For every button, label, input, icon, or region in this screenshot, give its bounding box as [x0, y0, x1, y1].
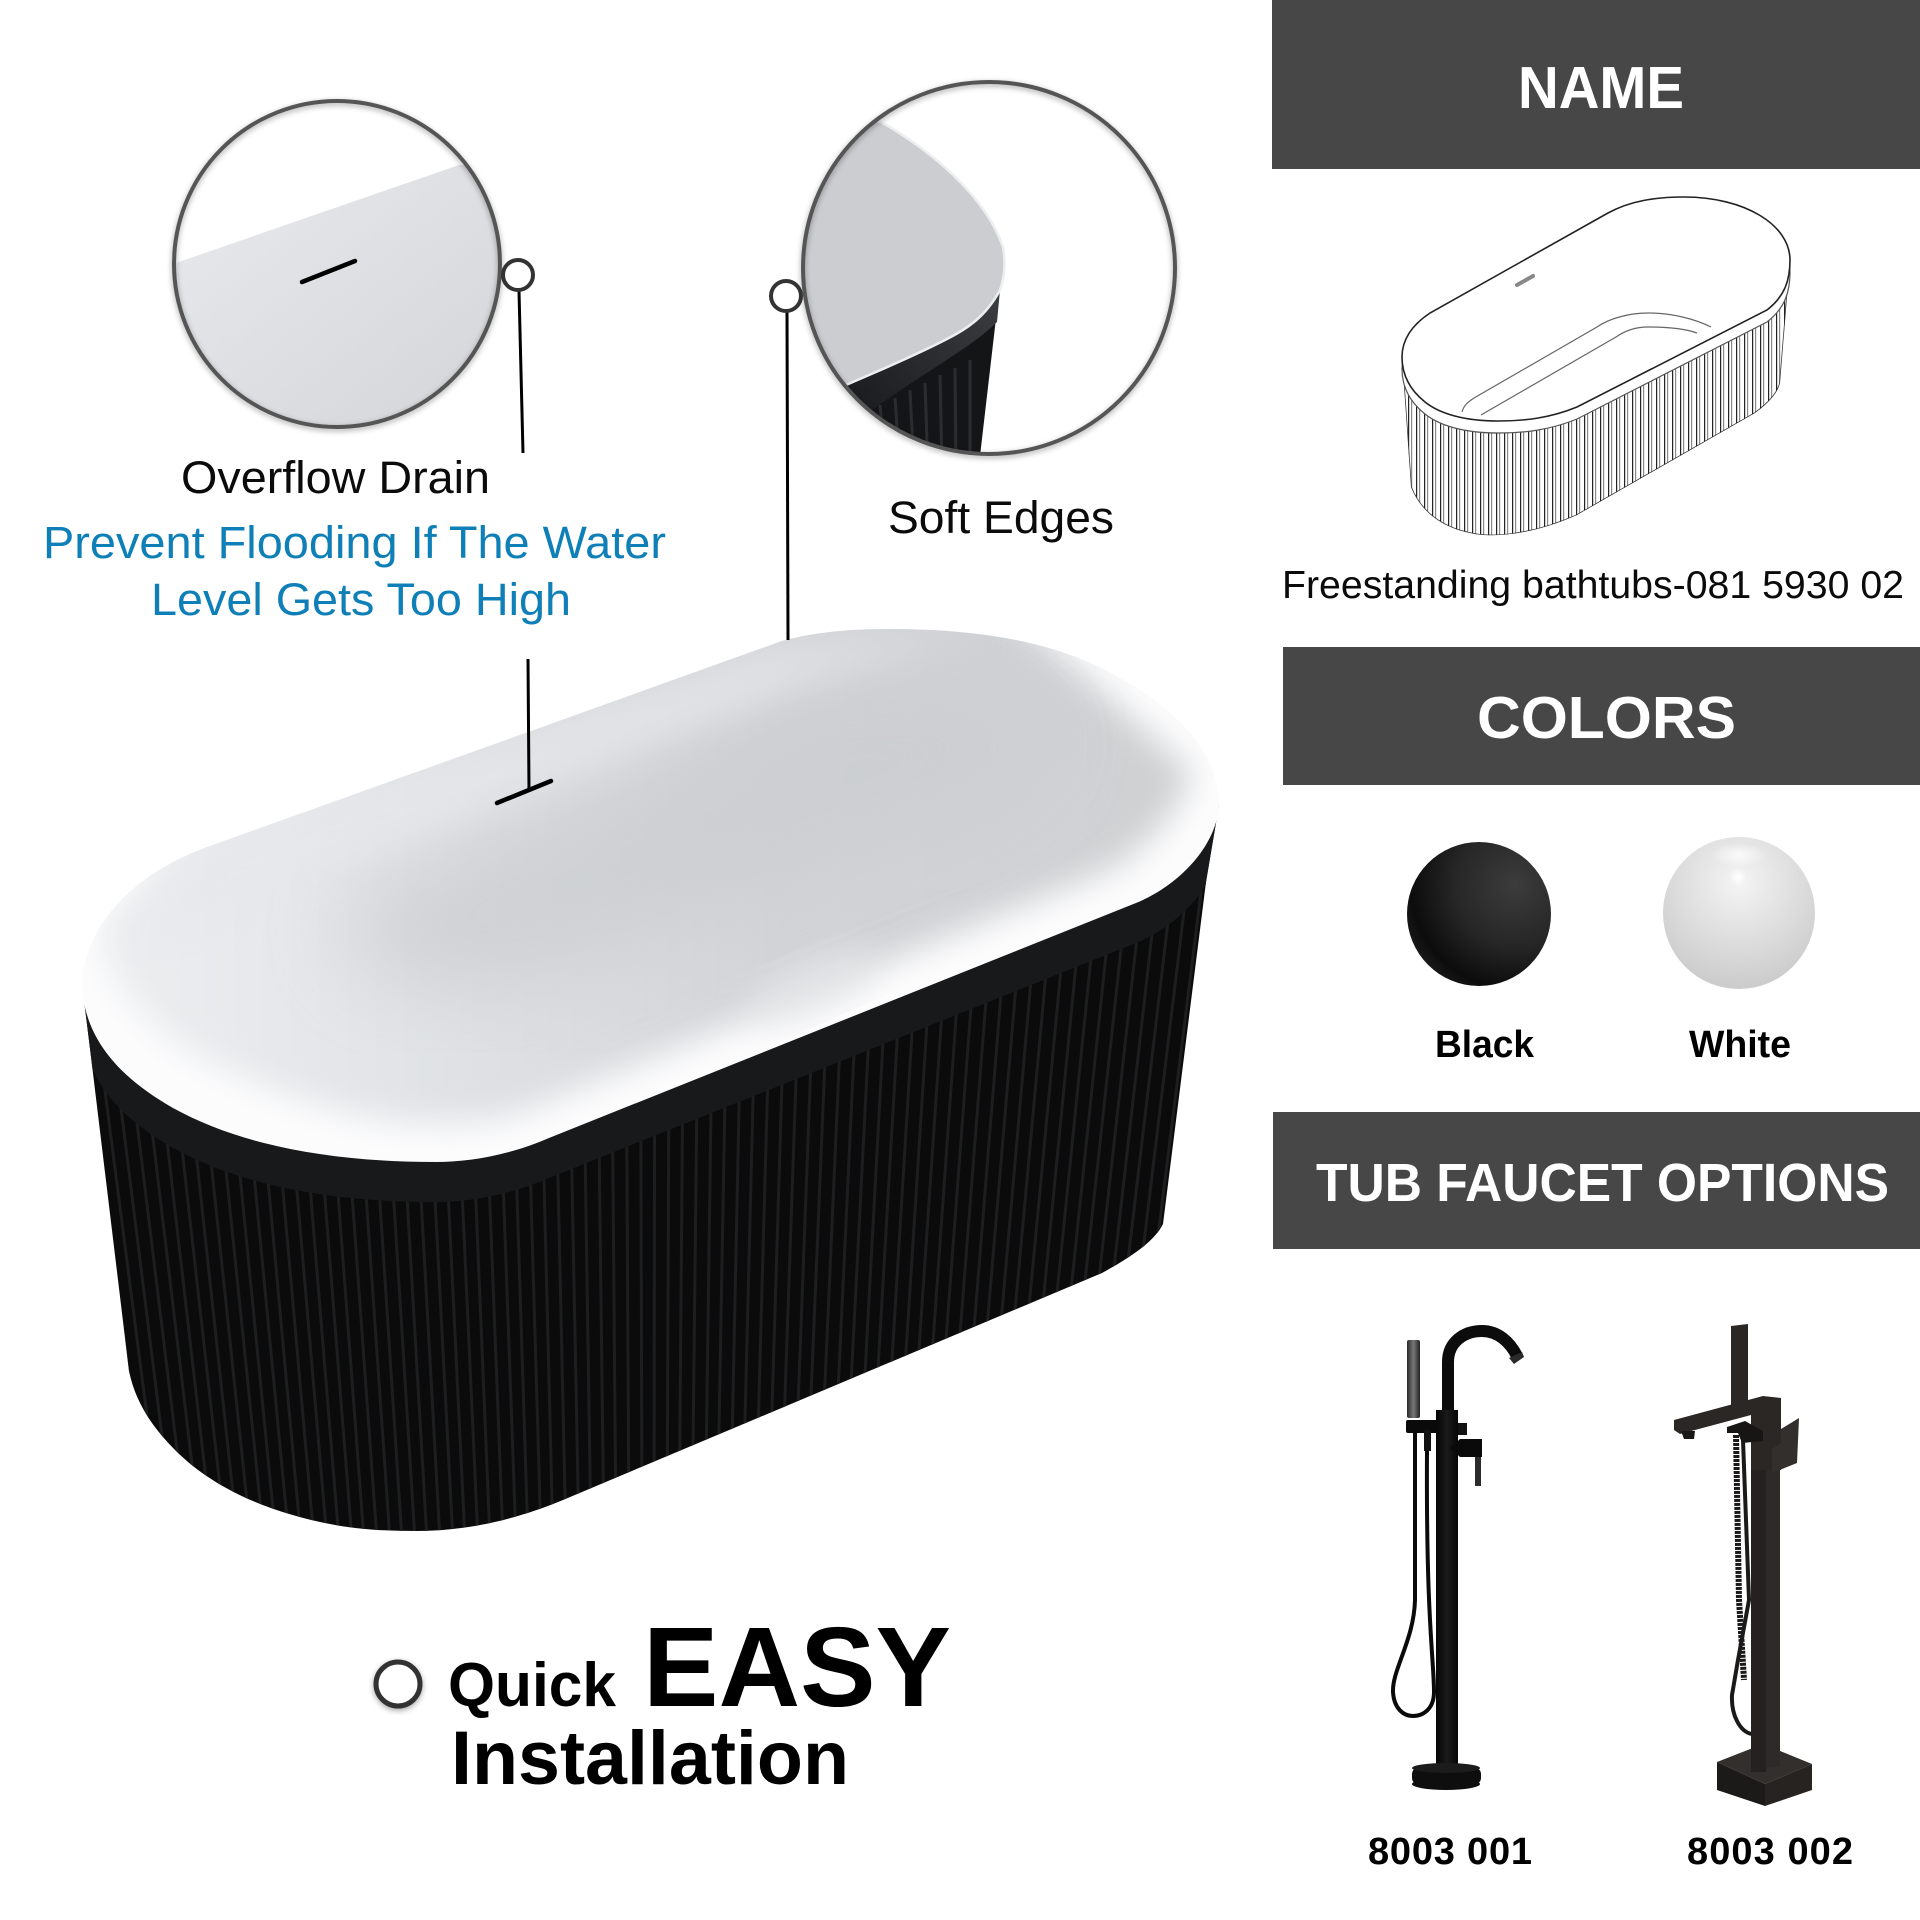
swatch: black: Black: [1435, 1024, 1535, 1066]
hand shower: [1407, 1340, 1420, 1418]
header: name: [1272, 0, 1920, 169]
callout: quick easy installation: Quick: [448, 1651, 616, 1720]
lip: [1402, 209, 1790, 433]
label: 8003 001: 8003 001: [1368, 1831, 1532, 1873]
base: [1412, 1768, 1481, 1784]
swatch: white: [1663, 837, 1815, 1066]
icon: ring bullet: [376, 1662, 420, 1706]
faucet option 8003 002: [1674, 1324, 1812, 1806]
beaded hose: [1736, 1435, 1744, 1680]
connector ring: overflow drain: [503, 260, 533, 290]
header: tub faucet options: [1273, 1112, 1920, 1249]
callout: quick easy installation: Installation: [451, 1716, 849, 1801]
description: prevent flooding: Level Gets Too High: [151, 574, 571, 625]
pole: [1751, 1467, 1766, 1772]
swatch: white: White: [1689, 1024, 1791, 1066]
header: name: NAME: [1518, 55, 1684, 121]
detail circle: soft edges: [780, 82, 1175, 470]
handle plate: [1772, 1418, 1799, 1473]
label: 8003 002: 8003 002: [1687, 1831, 1853, 1873]
detail circle: overflow drain: [170, 101, 510, 440]
header: colors: [1283, 647, 1920, 785]
mixer: [1450, 1439, 1482, 1457]
callout line: overflow drain to tub: [528, 659, 529, 790]
header: colors: COLORS: [1477, 685, 1736, 751]
rim: [1402, 197, 1790, 421]
header: tub faucet options: TUB FAUCET OPTIONS: [1316, 1153, 1889, 1213]
callout line: overflow circle to label: [519, 291, 523, 453]
connector ring: soft edges: [771, 281, 801, 311]
description: prevent flooding: Prevent Flooding If The Water: [43, 517, 666, 568]
overflow slot: [497, 781, 551, 803]
callout: quick easy installation: EASY: [643, 1604, 951, 1730]
hose: [1393, 1433, 1434, 1716]
hand shower: [1731, 1324, 1748, 1408]
callout line: soft edges to tub: [787, 312, 788, 640]
main bathtub: [84, 629, 1219, 1531]
gooseneck spout: [1448, 1331, 1517, 1412]
inner basin: [1462, 313, 1711, 415]
fluted side: [1404, 295, 1788, 536]
smooth hose: [1732, 1440, 1752, 1734]
pole: [1436, 1410, 1458, 1772]
model name: Freestanding bathtubs-081 5930 02: [1282, 564, 1904, 607]
faucet option 8003 001: [1393, 1331, 1524, 1790]
description: prevent flooding: [43, 517, 666, 625]
label: overflow drain: Overflow Drain: [181, 452, 490, 503]
lever: [1727, 1421, 1763, 1443]
tub fluted body: [84, 805, 1219, 1531]
label: soft edges: Soft Edges: [888, 492, 1114, 543]
holder arm: [1406, 1420, 1438, 1433]
tub white basin: [84, 629, 1219, 1162]
callout: quick easy installation: [376, 1604, 951, 1801]
overflow slot: [1517, 276, 1533, 285]
spout: [1674, 1396, 1781, 1470]
base: [1717, 1744, 1812, 1784]
line drawing of bathtub: [1402, 197, 1790, 535]
swatch: black: [1407, 842, 1551, 1066]
